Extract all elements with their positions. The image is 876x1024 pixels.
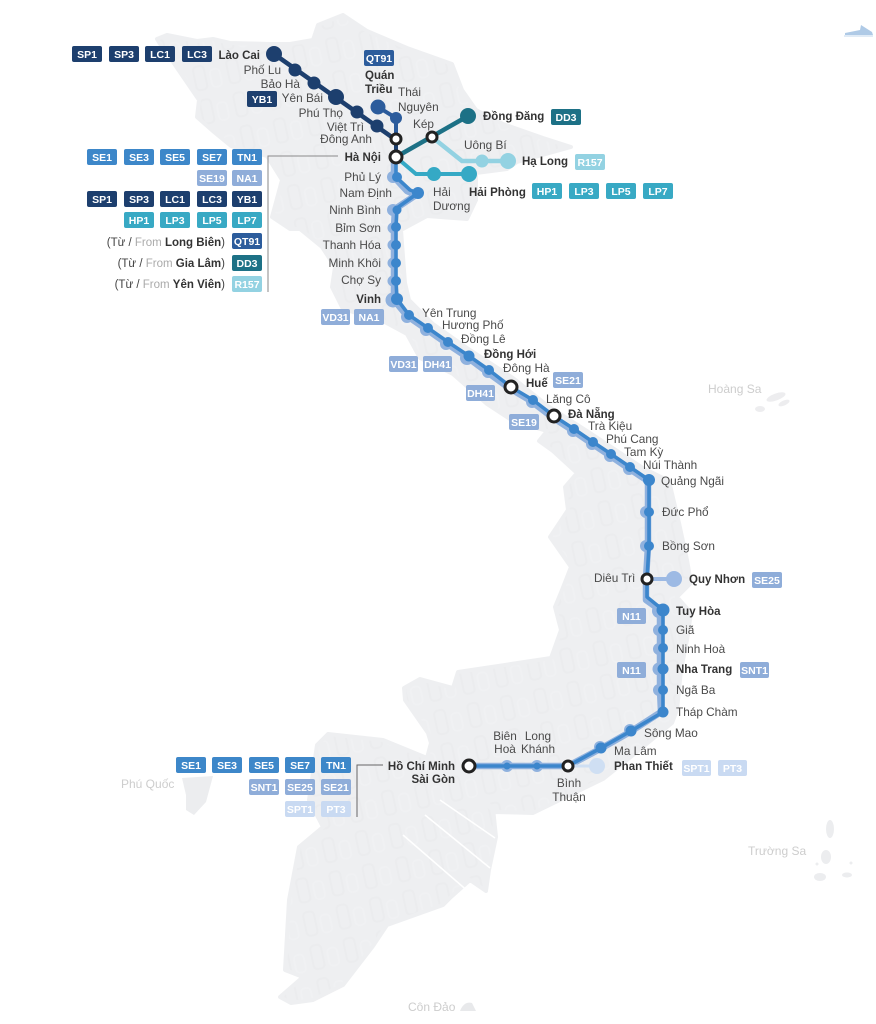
label: Bỉm Sơn: Bỉm Sơn xyxy=(335,221,381,235)
train badges: Hồ Chí Minh: SE5 xyxy=(254,760,274,772)
label: Hoàng Sa: Hoàng Sa xyxy=(708,382,762,396)
train badge: Đà Nẵng: SE19 xyxy=(511,417,537,429)
train badges: Hà Nội: SE19 xyxy=(199,173,225,185)
train badges: Hà Nội: SE1 xyxy=(92,152,112,164)
label: Hải Dương: Hải xyxy=(433,185,451,199)
label: Long Khánh: Long xyxy=(525,729,551,743)
train badges: Hà Nội: DD3 xyxy=(236,258,258,270)
train badge: Quy Nhơn xyxy=(752,572,782,588)
island labels xyxy=(121,382,806,1014)
train badges: Hồ Chí Minh: TN1 xyxy=(326,760,346,772)
train badges: Hồ Chí Minh: SE1 xyxy=(181,760,201,772)
island: Phú Quốc xyxy=(182,776,213,815)
label: Huế: Huế xyxy=(526,378,548,390)
branch: Quán Triều xyxy=(370,100,402,139)
train badge: Hạ Long xyxy=(575,154,605,170)
branch: Quy Nhơn xyxy=(647,571,682,587)
train badges: Hà Nội: SP1 xyxy=(92,194,112,206)
label: Hương Phố: Hương Phố xyxy=(442,318,504,332)
label: Tuy Hòa: Tuy Hòa xyxy=(676,606,721,618)
label: Biên Hoà: Hoà xyxy=(494,742,516,756)
train badge: Quán Triều xyxy=(364,50,394,66)
label: Tam Kỳ: Tam Kỳ xyxy=(624,445,663,459)
label: Chợ Sy: Chợ Sy xyxy=(341,273,381,287)
train badge: Quán Triều: QT91 xyxy=(366,53,392,65)
train badges: Hồ Chí Minh: SE21 xyxy=(323,782,349,794)
train badges: Lào Cai xyxy=(72,46,212,62)
train badges: Vinh: VD31 xyxy=(322,312,349,324)
train badge: Hạ Long: R157 xyxy=(577,157,603,169)
label: Đông Hà: Đông Hà xyxy=(503,361,550,375)
train badges: Hà Nội: YB1 xyxy=(237,194,257,206)
train badges: Hà Nội: LC3 xyxy=(202,194,222,206)
train badges: Hồ Chí Minh: PT3 xyxy=(326,804,346,816)
train badge: Huế SE21 xyxy=(553,372,583,388)
train badges: Đồng Hới xyxy=(389,356,452,372)
label: Nha Trang: Nha Trang xyxy=(676,664,732,676)
train badges: Hà Nội: SE3 xyxy=(129,152,149,164)
train badges: Hải Phòng: HP1 xyxy=(537,186,557,198)
train badges: Hà Nội: LC1 xyxy=(165,194,185,206)
train badges: Hà Nội: HP1 xyxy=(129,215,149,227)
train badges: Lào Cai: SP1 xyxy=(77,49,97,61)
label: Diêu Trì: Diêu Trì xyxy=(594,571,635,585)
label: Quán Triều: Quán xyxy=(365,70,394,82)
train badges: Hà Nội: QT91 xyxy=(234,236,260,248)
train badges: Đồng Hới: DH41 xyxy=(424,359,451,371)
label: Ma Lâm: Ma Lâm xyxy=(614,744,657,758)
label: Trường Sa: Trường Sa xyxy=(748,844,806,858)
train badge: Huế DH41: DH41 xyxy=(467,388,494,400)
label: Hải Phòng: Hải Phòng xyxy=(469,187,526,199)
label: Nam Định: Nam Định xyxy=(340,186,392,200)
line: north-south light band xyxy=(386,158,666,772)
branch: Lào Cai xyxy=(266,46,396,157)
label: Hồ Chí Minh Sài Gòn: Hồ Chí Minh xyxy=(388,761,455,773)
line: north-south main xyxy=(391,157,670,770)
label: Núi Thành: Núi Thành xyxy=(643,458,697,472)
train badge: Nha Trang SNT1: SNT1 xyxy=(741,665,768,677)
label: Hồ Chí Minh Sài Gòn: Sài Gòn xyxy=(412,774,455,786)
train badges: Hải Phòng: LP3 xyxy=(574,186,594,198)
label: Bảo Hà: Bảo Hà xyxy=(261,77,300,91)
train badges: Vinh xyxy=(321,309,384,325)
label: Thanh Hóa: Thanh Hóa xyxy=(323,238,381,252)
train badges: Vinh: NA1 xyxy=(358,312,380,324)
train badge: Quy Nhơn: SE25 xyxy=(754,575,780,587)
label: Đồng Đăng: Đồng Đăng xyxy=(483,111,544,123)
label: Việt Trì: Việt Trì xyxy=(327,120,364,134)
train badge: Nha Trang N11 xyxy=(617,662,646,678)
label: Lăng Cô: Lăng Cô xyxy=(546,392,591,406)
train badges: Hà Nội xyxy=(87,149,262,292)
island group: Hoàng Sa xyxy=(755,390,790,412)
train badges: Phan Thiết: SPT1 xyxy=(683,763,710,775)
station labels xyxy=(218,50,745,804)
label: Côn Đảo: Côn Đảo xyxy=(408,1000,456,1014)
logo xyxy=(844,25,873,36)
train badges: Hồ Chí Minh xyxy=(176,757,351,817)
label: Bình Thuận: Thuận xyxy=(552,790,586,804)
label: Quy Nhơn: Quy Nhơn xyxy=(689,574,745,586)
label: Quảng Ngãi: Quảng Ngãi xyxy=(661,474,724,488)
connector: Hồ Chí Minh trains xyxy=(357,765,383,817)
train badges: Hà Nội: TN1 xyxy=(237,152,257,164)
label: Đồng Lê: Đồng Lê xyxy=(461,332,506,346)
train badges: Hà Nội: SP3 xyxy=(129,194,149,206)
train badge: Tuy Hòa xyxy=(617,608,646,624)
train badges: Hải Phòng: LP5 xyxy=(611,186,631,198)
train badges: Hà Nội: SE5 xyxy=(165,152,185,164)
label: Yên Trung: Yên Trung xyxy=(422,306,476,320)
label: Phú Cang: Phú Cang xyxy=(606,432,658,446)
train badges: Hải Phòng xyxy=(532,183,673,199)
branch: Đồng Đăng xyxy=(396,108,476,157)
label: Hà Nội: Hà Nội xyxy=(345,152,381,164)
train badges: Hà Nội: R157 xyxy=(234,279,260,291)
label: Đông Anh: Đông Anh xyxy=(320,132,372,146)
train badges: Hà Nội: NA1 xyxy=(236,173,258,185)
train badge: Tuy Hòa: N11 xyxy=(622,611,641,623)
branch: Hạ Long xyxy=(432,137,516,169)
map of Vietnam xyxy=(157,15,691,1003)
label: Thái Nguyên: Thái xyxy=(398,85,421,99)
train badges: Hải Phòng: LP7 xyxy=(648,186,668,198)
train badge: Đà Nẵng xyxy=(509,414,539,430)
label: Tháp Chàm: Tháp Chàm xyxy=(676,705,738,719)
island group: Trường Sa xyxy=(814,820,852,881)
train badge: Nha Trang N11: N11 xyxy=(622,665,641,677)
label: Kép: Kép xyxy=(413,117,434,131)
train badges: Lào Cai: SP3 xyxy=(114,49,134,61)
island: Côn Đảo xyxy=(460,1003,476,1011)
train badges: Lào Cai: LC3 xyxy=(187,49,207,61)
train badge: Đồng Đăng xyxy=(551,109,581,125)
train badges: Lào Cai: LC1 xyxy=(150,49,170,61)
label: Bình Thuận: Bình xyxy=(557,776,581,790)
branch: Phan Thiết xyxy=(568,758,605,774)
note: from Gia Lâm: (Từ / From Gia Lâm) xyxy=(118,258,225,270)
label: Ngã Ba: Ngã Ba xyxy=(676,683,716,697)
train badges: Phan Thiết: PT3 xyxy=(723,763,742,775)
label: Phú Thọ: Phú Thọ xyxy=(299,106,343,120)
train badges: Hồ Chí Minh: SNT1 xyxy=(251,782,278,794)
train badges: Hà Nội: LP5 xyxy=(202,215,222,227)
note: from Yên Viên: (Từ / From Yên Viên) xyxy=(115,279,225,291)
label: Phủ Lý: Phủ Lý xyxy=(344,170,381,184)
label: Sông Mao: Sông Mao xyxy=(644,726,698,740)
train badge: Đồng Đăng: DD3 xyxy=(555,112,577,124)
label: Phố Lu: Phố Lu xyxy=(244,63,281,77)
train badge: Yên Bái: YB1 xyxy=(252,94,272,106)
label: Thái Nguyên: Nguyên xyxy=(398,100,439,114)
label: Đức Phổ: Đức Phổ xyxy=(662,505,709,519)
label: Ninh Hoà: Ninh Hoà xyxy=(676,642,726,656)
train badges: Hà Nội: SE7 xyxy=(202,152,222,164)
label: Bồng Sơn: Bồng Sơn xyxy=(662,539,715,553)
train badge: Huế SE21: SE21 xyxy=(555,375,581,387)
label: Biên Hoà: Biên xyxy=(493,729,517,743)
train badge: Yên Bái xyxy=(247,91,277,107)
label: Uông Bí: Uông Bí xyxy=(464,138,507,152)
train badges: Hà Nội: LP7 xyxy=(237,215,257,227)
label: Đà Nẵng: Đà Nẵng xyxy=(568,408,615,421)
label: Ninh Bình: Ninh Bình xyxy=(329,203,381,217)
train badge: Huế DH41 xyxy=(466,385,495,401)
label: Phú Quốc: Phú Quốc xyxy=(121,777,174,791)
label: Đồng Hới: Đồng Hới xyxy=(484,349,536,361)
branch: Hải Phòng xyxy=(396,157,477,182)
label: Minh Khôi: Minh Khôi xyxy=(329,256,381,270)
connector: Hà Nội trains xyxy=(268,156,338,292)
train badge: Nha Trang SNT1 xyxy=(740,662,769,678)
train badges: Hồ Chí Minh: SE3 xyxy=(217,760,237,772)
note: from Long Biên: (Từ / From Long Biên) xyxy=(107,237,225,249)
label: Vinh: Vinh xyxy=(356,294,381,306)
label: Hải Dương: Dương xyxy=(433,199,470,213)
label: Trà Kiệu: Trà Kiệu xyxy=(588,419,632,433)
label: Long Khánh: Khánh xyxy=(521,742,555,756)
interchange stations xyxy=(390,132,652,772)
train badges: Hồ Chí Minh: SPT1 xyxy=(287,804,313,816)
train badges: Hồ Chí Minh: SE7 xyxy=(290,760,310,772)
train badges: Hồ Chí Minh: SE25 xyxy=(287,782,313,794)
label: Phan Thiết: Phan Thiết xyxy=(614,761,673,773)
label: Hạ Long: Hạ Long xyxy=(522,156,568,168)
label: Giã: Giã xyxy=(676,623,695,637)
train badges: Đồng Hới: VD31 xyxy=(390,359,417,371)
label: Yên Bái: Yên Bái xyxy=(282,91,323,105)
label: Lào Cai: Lào Cai xyxy=(218,50,260,62)
train badges: Hà Nội: LP3 xyxy=(165,215,185,227)
label: Quán Triều: Triều xyxy=(365,84,392,96)
train badges: Phan Thiết xyxy=(682,760,747,776)
